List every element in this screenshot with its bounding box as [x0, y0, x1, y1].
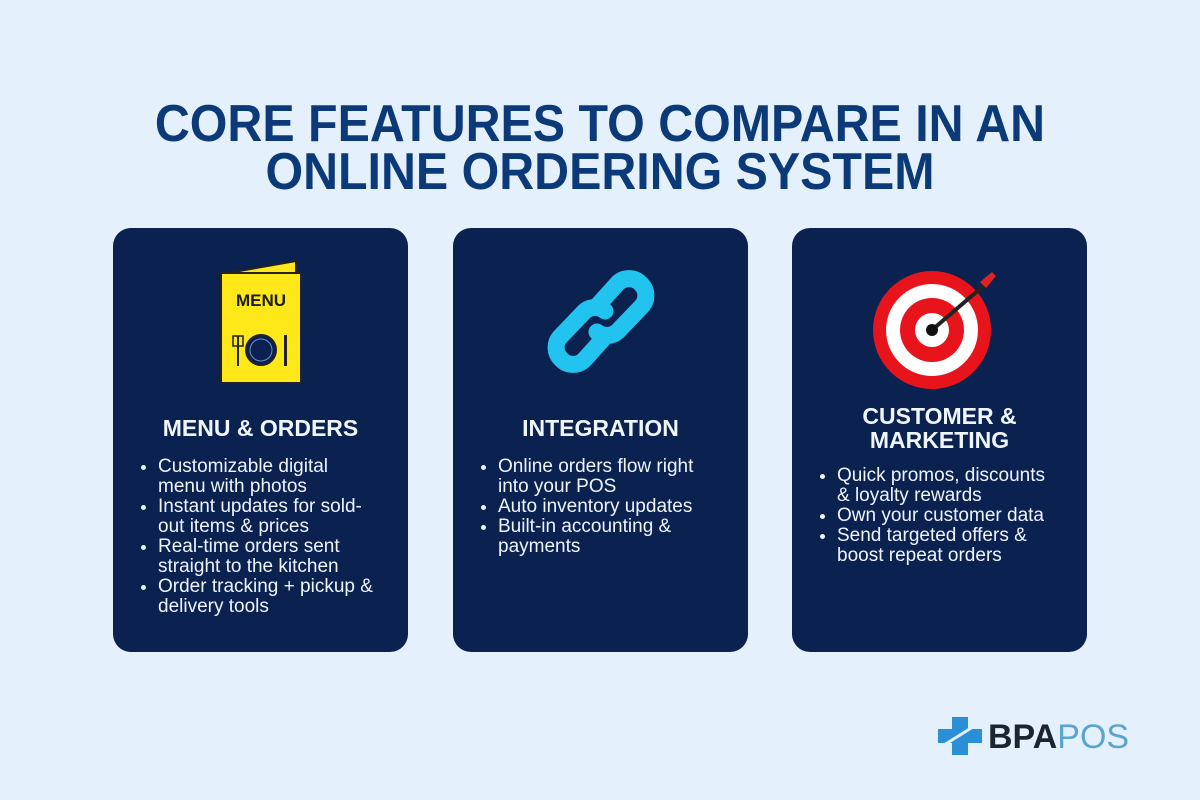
bullet list: Real-time orders sent straight to the kitchen — [158, 536, 340, 577]
bullet list: Own your customer data — [837, 505, 1044, 526]
icon: chain link — [548, 270, 654, 373]
heading: MENU & ORDERS — [163, 415, 358, 441]
bullet list: Quick promos, discounts & loyalty rewards — [837, 465, 1045, 506]
panel: integration — [453, 228, 748, 652]
bullet list: Order tracking + pickup & delivery tools — [158, 576, 373, 617]
icon: menu: MENU — [236, 291, 286, 310]
icon: cross — [938, 717, 982, 755]
bullet list — [481, 456, 694, 557]
bullet list: Instant updates for sold-out items & prices — [158, 496, 362, 537]
bullet list: Auto inventory updates — [498, 496, 692, 517]
title: ONLINE ORDERING SYSTEM — [265, 143, 935, 201]
title: CORE FEATURES TO COMPARE IN AN — [155, 95, 1045, 153]
heading: MARKETING — [870, 427, 1009, 453]
bullet list: Customizable digital menu with photos — [158, 456, 328, 497]
icon: menu — [220, 260, 302, 384]
heading: INTEGRATION — [522, 415, 679, 441]
panel: menu & orders — [113, 228, 408, 652]
bullet list — [141, 456, 373, 617]
heading — [862, 403, 1017, 453]
panel: customer & marketing — [792, 228, 1087, 652]
bullet list — [820, 465, 1045, 566]
title — [155, 95, 1045, 201]
logo: BPAPOS — [988, 718, 1129, 756]
icon: target — [873, 271, 996, 389]
bullet list: Send targeted offers & boost repeat orders — [837, 525, 1027, 566]
bullet list: Built-in accounting & payments — [498, 516, 671, 557]
heading: CUSTOMER & — [862, 403, 1017, 429]
bullet list: Online orders flow right into your POS — [498, 456, 693, 497]
